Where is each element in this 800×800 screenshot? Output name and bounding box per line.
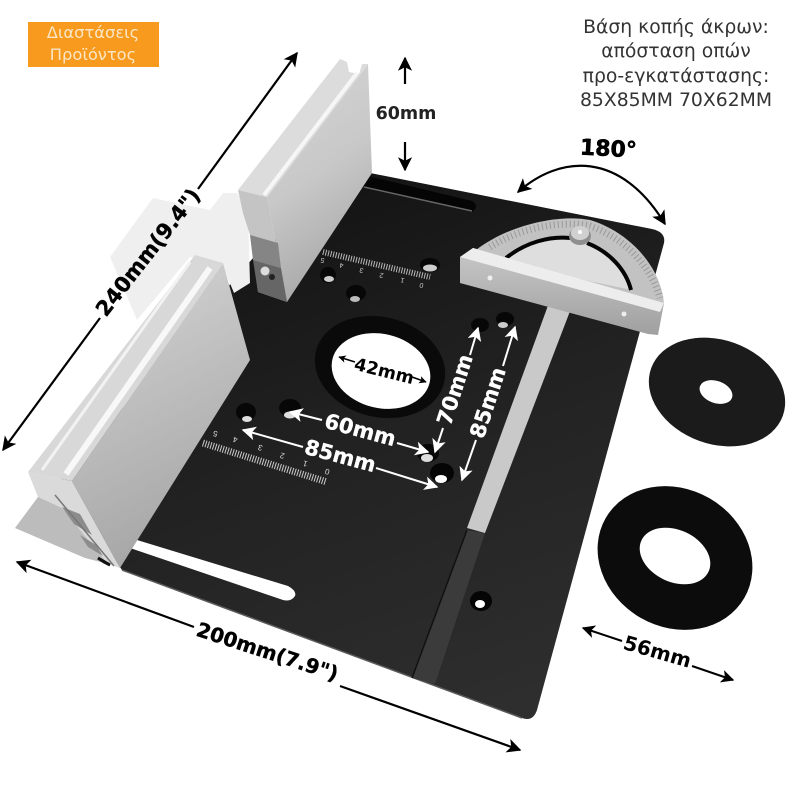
upper ruler scale: 5 [320, 256, 325, 263]
dimension: 180 degree rotation [518, 136, 665, 224]
protractor inner arc slot [506, 238, 631, 290]
black mounting plate [60, 172, 664, 719]
dimension: 85mm vertical spacing [462, 327, 515, 480]
washer: small opening [633, 319, 800, 465]
protractor stick [467, 300, 572, 533]
upper ruler scale: 4 [339, 261, 344, 268]
text block: hole spacing: 85X85MM 70X62MM [580, 90, 772, 111]
text block: hole spacing: Βάση κοπής άκρων: [583, 17, 769, 38]
dimension: 85mm hole spacing [243, 430, 437, 487]
plate holes [236, 258, 514, 611]
text block: hole spacing: προ-εγκατάστασης: [583, 66, 769, 87]
bottom slot [130, 540, 295, 600]
far aluminium fence [238, 59, 372, 302]
text block: hole spacing: απόσταση οπών [601, 41, 751, 62]
lower ruler scale [203, 428, 331, 482]
protractor knob [569, 226, 591, 245]
dimension: 70mm vertical spacing [432, 328, 478, 452]
dimension: 85mm vertical spacing: 85mm [465, 364, 511, 441]
text block: hole spacing [580, 17, 772, 111]
upper ruler scale: 3 [359, 266, 364, 273]
badge: product dimensions [28, 22, 159, 67]
router hole opening [324, 323, 438, 419]
near aluminium fence [15, 255, 250, 568]
washer: large opening [571, 458, 779, 658]
dimension: 70mm vertical spacing: 70mm [432, 351, 478, 428]
dimension: 60mm hole spacing: 60mm [322, 409, 399, 451]
lower ruler scale: 1 [302, 458, 309, 468]
dimension: 60mm fence height: 60mm [376, 104, 436, 124]
lower ruler scale: 3 [257, 442, 264, 452]
dimension: 56mm washer: 56mm [621, 630, 694, 673]
lower ruler scale: 2 [279, 450, 286, 460]
upper ruler scale [320, 252, 430, 288]
dimension: 56mm washer [583, 628, 733, 680]
upper ruler scale: 0 [419, 281, 424, 288]
lower ruler scale: 5 [212, 428, 219, 438]
router hole countersink [304, 303, 456, 431]
protractor bar [460, 248, 664, 335]
lower ruler scale: 4 [232, 434, 239, 444]
top slot [362, 176, 476, 212]
dimension: 60mm hole spacing [290, 409, 428, 452]
upper ruler scale: 2 [379, 271, 384, 278]
dimension: 60mm fence height [376, 58, 436, 170]
dimension: 240mm: 240mm(9.4") [91, 184, 205, 321]
dimension: 200mm [17, 562, 520, 750]
lower ruler scale: 0 [324, 466, 331, 476]
dimension: 42mm bore: 42mm [352, 355, 416, 389]
upper ruler scale: 1 [400, 276, 405, 283]
dimension: 180 degree rotation: 180° [579, 136, 637, 163]
protractor [460, 218, 664, 533]
badge: product dimensions: Προϊόντος [50, 45, 136, 64]
protractor half disc [476, 218, 664, 315]
mitre groove [412, 530, 485, 684]
dimension: 85mm hole spacing: 85mm [302, 435, 379, 477]
dimension: 240mm [3, 53, 297, 450]
badge: product dimensions: Διαστάσεις [47, 23, 139, 42]
dimension: 200mm: 200mm(7.9") [194, 617, 341, 686]
translucent fence connector [110, 193, 250, 320]
